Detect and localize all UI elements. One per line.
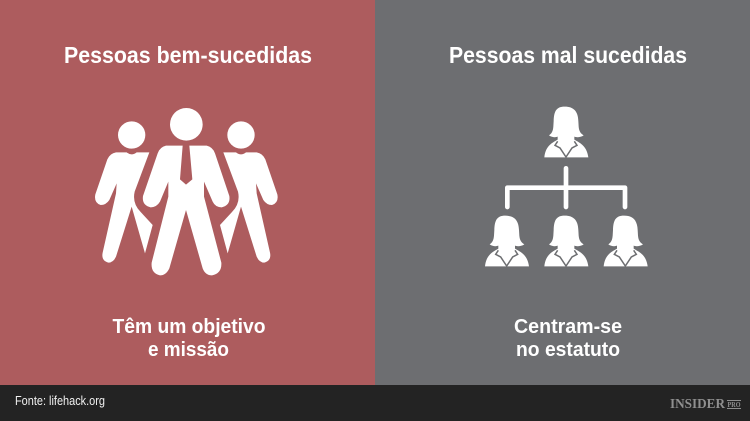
text: has a goal and mission [112,315,266,361]
icon part: lower middle woman [544,216,588,266]
logo: Insider Pro: PRO [728,401,741,409]
icon part: centre man with tie [143,108,230,275]
text: focus on status: Centram-se [514,315,622,338]
text: focus on status [514,315,622,361]
icon part: top woman [544,107,588,157]
footer bar [0,385,750,421]
logo: Insider Pro: INSIDER [670,396,725,411]
heading: successful people: Pessoas bem-sucedidas [64,42,312,68]
panel: successful people [0,0,375,385]
panel: unsuccessful people [375,0,750,385]
icon part: lower left woman [485,216,529,266]
heading: unsuccessful people: Pessoas mal sucedidas [449,42,687,68]
icon: team of three men [95,108,278,275]
icon part: right man [220,121,278,263]
text: focus on status: no estatuto [516,338,620,361]
text: has a goal and mission: Têm um objetivo [112,315,266,338]
source credit: Fonte: lifehack.org [15,394,105,408]
icon part: left man [95,121,153,263]
icon part: lower right woman [604,216,648,266]
icon: hierarchy org chart [485,107,648,266]
text: has a goal and mission: e missão [148,338,229,361]
icon part: connector lines [507,168,625,207]
